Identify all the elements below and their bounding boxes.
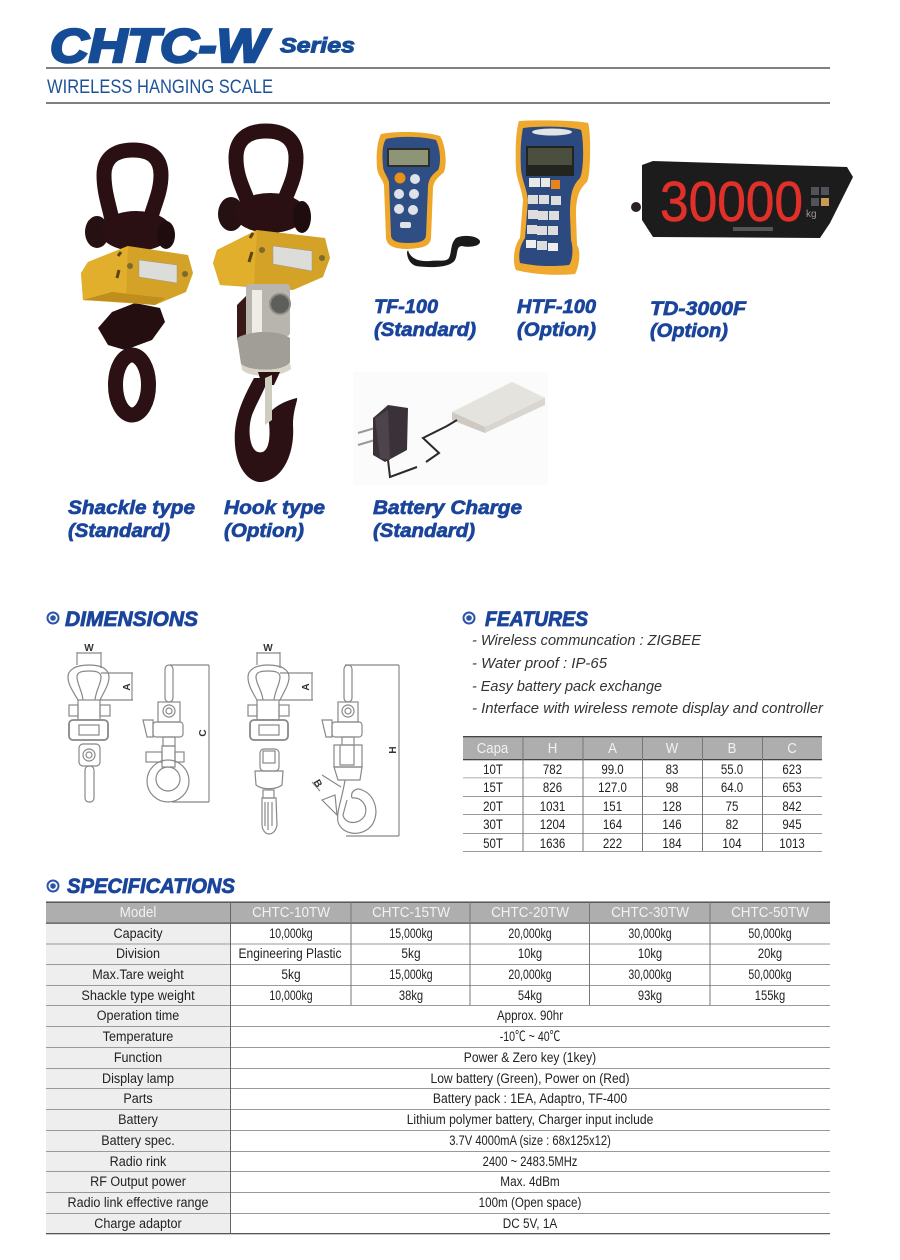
specifications table: Approx. 90hr [497,1007,564,1023]
specifications table: Battery [118,1111,158,1127]
caption: shackle type: Shackle type [68,497,195,519]
caption: TF-100 [374,296,476,341]
drawing: hook type dimensions: A [301,683,312,691]
specifications table: 93kg [638,988,662,1003]
specifications table: 15,000kg [389,967,433,982]
specifications table: 100m (Open space) [479,1194,581,1210]
specifications table: 10,000kg [269,926,313,941]
dimensions table: 1636 [540,835,565,851]
specifications table: Power & Zero key (1key) [464,1049,596,1065]
dimensions table: 75 [726,798,738,814]
dimensions table: W [666,739,679,756]
photo: battery and charger [353,372,548,485]
dimensions table: 782 [543,761,562,777]
dimensions table: C [787,739,797,756]
drawing: shackle type dimensions [68,643,209,802]
photo: hook type scale [213,131,330,482]
dimensions table: 184 [662,835,682,851]
photo: TD-3000F remote display [631,161,853,238]
dimensions table: H [548,739,557,756]
caption: TD-3000F: TD-3000F [650,298,747,320]
specifications table: 38kg [399,988,423,1003]
specifications table: RF Output power [90,1173,186,1189]
caption: HTF-100 [517,296,596,341]
drawing: hook type dimensions: W [263,643,273,654]
specifications table: Lithium polymer battery, Charger input include [407,1111,653,1127]
photo: TF-100 remote [377,132,480,267]
panel: features [462,608,824,852]
captions: product photos [68,296,747,542]
specifications table: Temperature [103,1028,173,1044]
dimensions table [463,736,822,852]
specifications table: 20,000kg [508,967,552,982]
caption: HTF-100: (Option) [517,319,596,341]
specifications table: 10kg [638,946,662,961]
icon: dimensions bullet [46,612,60,624]
drawing: hook type dimensions: B [311,778,324,790]
features list [472,633,824,717]
features list: - Easy battery pack exchange [472,679,662,695]
specifications table: CHTC-30TW [611,904,689,921]
dimensions table: 653 [782,779,802,795]
specifications table: CHTC-15TW [372,904,450,921]
caption: hook type: Hook type [224,497,325,519]
specifications table: Engineering Plastic [238,945,342,961]
specifications table: Battery pack : 1EA, Adaptro, TF-400 [433,1090,627,1106]
drawing: shackle type dimensions: A [122,683,133,691]
specifications table: 20,000kg [508,926,552,941]
caption: shackle type [68,497,195,542]
specifications table: -10℃ ~ 40℃ [500,1029,560,1044]
drawing: hook type dimensions: H [388,746,399,754]
drawing: shackle type dimensions: W [84,643,94,654]
dimensions table: 826 [543,779,562,795]
specifications table: Division [116,945,160,961]
dimensions table: A [608,739,617,756]
dimensions table: 10T [483,761,503,777]
specifications table: 2400 ~ 2483.5MHz [483,1154,577,1169]
dimensions table: 1031 [540,798,565,814]
specifications table: CHTC-10TW [252,904,330,921]
specifications table: 15,000kg [389,926,433,941]
specifications table: Radio rink [110,1153,167,1169]
specifications table: 30,000kg [628,967,672,982]
subtitle: WIRELESS HANGING SCALE [47,77,273,98]
specifications table: 10kg [518,946,542,961]
caption: HTF-100: HTF-100 [517,296,596,318]
icon: features bullet [462,612,476,624]
specifications table: Parts [123,1090,153,1106]
dimensions table: 99.0 [601,761,624,777]
photo: HTF-100 remote [514,120,590,275]
dimensions table: 83 [666,761,678,777]
caption: TF-100: TF-100 [374,296,438,318]
dimensions table: 98 [666,779,678,795]
specifications table: Low battery (Green), Power on (Red) [430,1070,630,1086]
caption: hook type [224,497,325,542]
dimensions table: 55.0 [721,761,743,777]
dimensions table: 623 [782,761,802,777]
icon: specifications bullet [46,880,60,892]
specifications table: Capacity [114,925,163,941]
drawing: hook type dimensions [248,643,399,836]
caption: TD-3000F: (Option) [650,320,728,342]
caption: battery charge: (Standard) [373,520,475,542]
specifications table: Display lamp [102,1070,174,1086]
specifications table: Function [114,1049,162,1065]
specifications table: Shackle type weight [81,987,195,1003]
dimensions table: B [728,739,736,756]
specifications table: Radio link effective range [67,1194,209,1210]
specifications table: 50,000kg [748,926,792,941]
caption: hook type: (Option) [224,520,304,542]
dimensions table: 127.0 [598,779,627,795]
caption: TD-3000F [650,298,747,342]
specifications table [46,902,830,1234]
features list: - Wireless communcation : ZIGBEE [472,633,701,649]
specifications table: 30,000kg [628,926,672,941]
photo: shackle type scale [81,150,193,415]
specifications table: 20kg [758,946,782,961]
specifications table: 50,000kg [748,967,792,982]
title: CHTC-W [50,19,271,72]
specifications table: Battery spec. [101,1132,175,1148]
heading: dimensions: DIMENSIONS [65,608,198,631]
specifications table: 10,000kg [269,988,313,1003]
specifications table: Max.Tare weight [92,966,184,982]
dimensions table: 1204 [540,816,565,832]
dimensions table: Capa [477,739,508,756]
series label: Series [280,34,355,58]
dimensions table: 945 [782,816,802,832]
specifications table: 155kg [755,988,785,1003]
features list: - Interface with wireless remote display and controller [472,701,824,717]
dimensions table: 128 [662,798,682,814]
specifications table: 5kg [281,966,301,982]
specifications table: Operation time [97,1007,179,1023]
caption: battery charge: Battery Charge [373,497,522,519]
specifications table: Model [120,904,156,921]
caption: battery charge [373,497,522,542]
caption: TF-100: (Standard) [374,319,476,341]
dimensions table: 50T [483,835,503,851]
header [46,19,830,104]
specifications table: 3.7V 4000mA (size : 68x125x12) [449,1133,611,1148]
dimensions table: 146 [662,816,682,832]
panel: dimensions [46,608,399,836]
dimensions table: 1013 [779,835,805,851]
specifications table: Charge adaptor [94,1215,182,1231]
dimensions table: 82 [726,816,738,832]
dimensions table: 151 [603,798,622,814]
photo: TD-3000F remote display: kg [806,209,817,220]
specifications table: CHTC-20TW [491,904,569,921]
dimensions table: 64.0 [721,779,743,795]
specifications table: 54kg [518,988,542,1003]
dimensions table: 164 [603,816,622,832]
caption: shackle type: (Standard) [68,520,170,542]
dimensions table: 20T [483,798,503,814]
dimensions table: 842 [782,798,802,814]
photo: TD-3000F remote display: 30000 [660,170,803,234]
features list: - Water proof : IP-65 [472,656,608,672]
heading: specifications: SPECIFICATIONS [67,875,235,898]
specifications table: CHTC-50TW [731,904,809,921]
dimensions table: 30T [483,816,503,832]
dimensions table: 15T [483,779,503,795]
specifications table: Max. 4dBm [500,1173,560,1189]
dimensions table: 104 [722,835,742,851]
heading: features: FEATURES [485,608,588,631]
specifications table: 5kg [401,945,421,961]
panel: specifications [46,875,830,1234]
dimensions table: 222 [603,835,622,851]
drawing: shackle type dimensions: C [198,729,209,737]
specifications table: DC 5V, 1A [503,1215,558,1231]
